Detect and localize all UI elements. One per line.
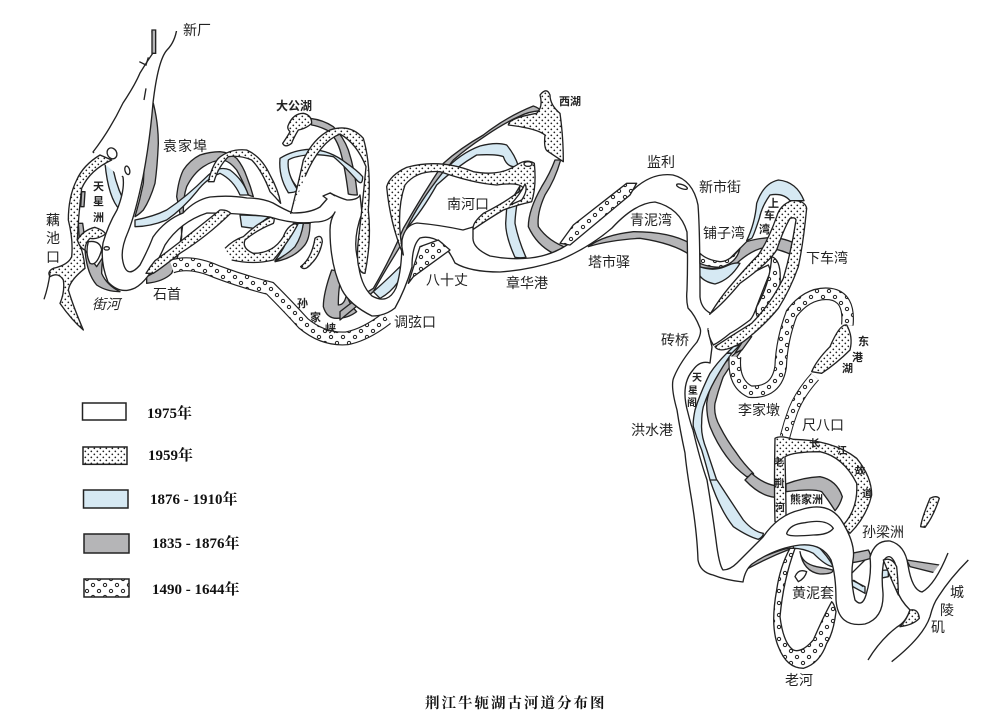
1835-1876 channels: upper reach — [78, 103, 357, 318]
label: 南河口: 南河口 — [447, 196, 489, 212]
1835-1876 channels: lower reach — [745, 473, 939, 574]
label: 塔市驿: 塔市驿 — [588, 254, 630, 270]
label: 李家墩: 李家墩 — [738, 402, 780, 418]
label: 天星阁: 星 — [688, 385, 698, 397]
1959 channels: Nanhekou and West Lake — [387, 91, 563, 255]
label: 大公湖: 大公湖 — [276, 98, 312, 113]
legend — [82, 403, 240, 598]
1876-1910 channels: upper reach — [105, 149, 363, 261]
label: 监利: 监利 — [647, 154, 675, 170]
small river islands — [87, 146, 131, 264]
label: 天星洲: 天 — [93, 180, 104, 193]
1876-1910 channels: Shangchewan reach — [699, 180, 804, 353]
1876-1910 channels: Tianxingge reach — [693, 353, 732, 480]
label: 铺子湾: 铺子湾 — [703, 225, 745, 241]
label: 黄泥套: 黄泥套 — [792, 585, 834, 601]
title: 荆江牛轭湖古河道分布图 — [425, 694, 606, 712]
1876-1910 channels: middle reach — [373, 144, 526, 298]
1959 channels: Sunliangzhou lake and bend — [883, 497, 939, 627]
label: 城陵矶: 城 — [950, 584, 964, 600]
1959 channels: upper reach — [49, 113, 369, 330]
label: 熊家洲: 熊家洲 — [790, 492, 823, 506]
label: 上车湾: 车 — [764, 208, 775, 222]
label: 章华港: 章华港 — [506, 275, 548, 291]
legend item: 1975: 1975年 — [147, 404, 192, 422]
label: 孙家峡: 家 — [310, 310, 321, 324]
label: 东港湖: 湖 — [842, 361, 853, 375]
legend item: 1835-1876 — [84, 534, 240, 553]
legend item: 1876-1910 — [84, 490, 238, 508]
1490-1644 channel: Lijiadun band — [735, 294, 848, 437]
label: 藕池口: 口 — [46, 249, 60, 265]
label: 藕池口: 池 — [46, 230, 60, 246]
label: 砖桥: 砖桥 — [661, 332, 689, 348]
1975 main river — [93, 25, 948, 660]
1490-1644 channel: Bashizhang, Jianli and Puziwan bands — [408, 183, 780, 318]
label: 老荆河: 荆 — [774, 477, 784, 490]
right bank of the Yangtze — [852, 560, 968, 662]
label: 东港湖: 东 — [858, 334, 869, 348]
label: 长江故道: 故 — [855, 464, 865, 477]
label: 藕池口: 藕 — [46, 212, 60, 228]
label: 东港湖: 港 — [852, 350, 863, 364]
label: 洪水港: 洪水港 — [631, 422, 673, 438]
1876-1910 channels: lower reach — [710, 480, 888, 593]
label: 老河: 老河 — [785, 672, 813, 688]
label: 孙家峡: 峡 — [325, 321, 336, 335]
1490-1644 channel: Sunjiaxia band — [172, 264, 387, 338]
legend item: 1876-1910: 1876 - 1910年 — [150, 490, 238, 508]
label: 城陵矶: 陵 — [940, 602, 954, 618]
1959 channel: lower part of Dagong loop — [225, 216, 298, 262]
label: 老荆河: 老 — [774, 456, 784, 469]
label: 上车湾: 湾 — [759, 222, 770, 236]
label: 八十丈: 八十丈 — [426, 272, 468, 288]
label: 新厂: 新厂 — [183, 22, 211, 38]
legend item: 1975 — [82, 403, 192, 422]
label: 调弦口: 调弦口 — [394, 314, 436, 330]
label: 孙梁洲: 孙梁洲 — [862, 524, 904, 540]
label: 天星洲: 星 — [93, 195, 104, 208]
label: 长江故道: 长 — [810, 437, 820, 450]
label: 青泥湾: 青泥湾 — [630, 212, 672, 228]
label: 天星阁: 天 — [692, 372, 702, 384]
1959 channel: old Jing river and Changjiang old course — [774, 437, 872, 533]
label: 街河: 街河 — [92, 296, 123, 312]
label: 孙家峡: 孙 — [297, 297, 308, 310]
top strip and flow arrow near Xinchang — [44, 30, 335, 299]
label: 天星阁: 阁 — [687, 396, 697, 409]
old river bay at Sanjiao — [708, 265, 770, 345]
legend item: 1490-1644 — [84, 579, 240, 598]
label: 长江故道: 江 — [837, 444, 847, 457]
label: 新市街: 新市街 — [699, 179, 741, 195]
legend item: 1835-1876: 1835 - 1876年 — [152, 534, 240, 552]
islands and details: middle and lower reach — [510, 162, 833, 582]
1835-1876 channels: middle reach — [340, 106, 690, 320]
label: 长江故道: 道 — [862, 487, 872, 500]
label: 石首: 石首 — [153, 286, 181, 302]
legend item: 1490-1644: 1490 - 1644年 — [152, 580, 240, 598]
label: 上车湾: 上 — [768, 197, 779, 210]
label: 袁家埠: 袁家埠 — [163, 138, 208, 154]
legend item: 1959: 1959年 — [148, 446, 193, 464]
1835-1876 channels: Tianxingge reach — [707, 350, 754, 477]
label: 下车湾: 下车湾 — [806, 250, 848, 266]
1490-1644 channel: Laohe loop — [774, 548, 836, 668]
label: 城陵矶: 矶 — [931, 619, 945, 635]
label: 西湖: 西湖 — [559, 94, 581, 108]
label: 尺八口: 尺八口 — [802, 417, 844, 433]
label: 天星洲: 洲 — [93, 211, 104, 224]
label: 老荆河: 河 — [775, 502, 785, 514]
1835-1876 channels: Shangchewan reach — [700, 237, 800, 353]
legend item: 1959 — [83, 446, 193, 464]
1959 channels: Xiachewan and Donggang Lake — [711, 201, 851, 373]
